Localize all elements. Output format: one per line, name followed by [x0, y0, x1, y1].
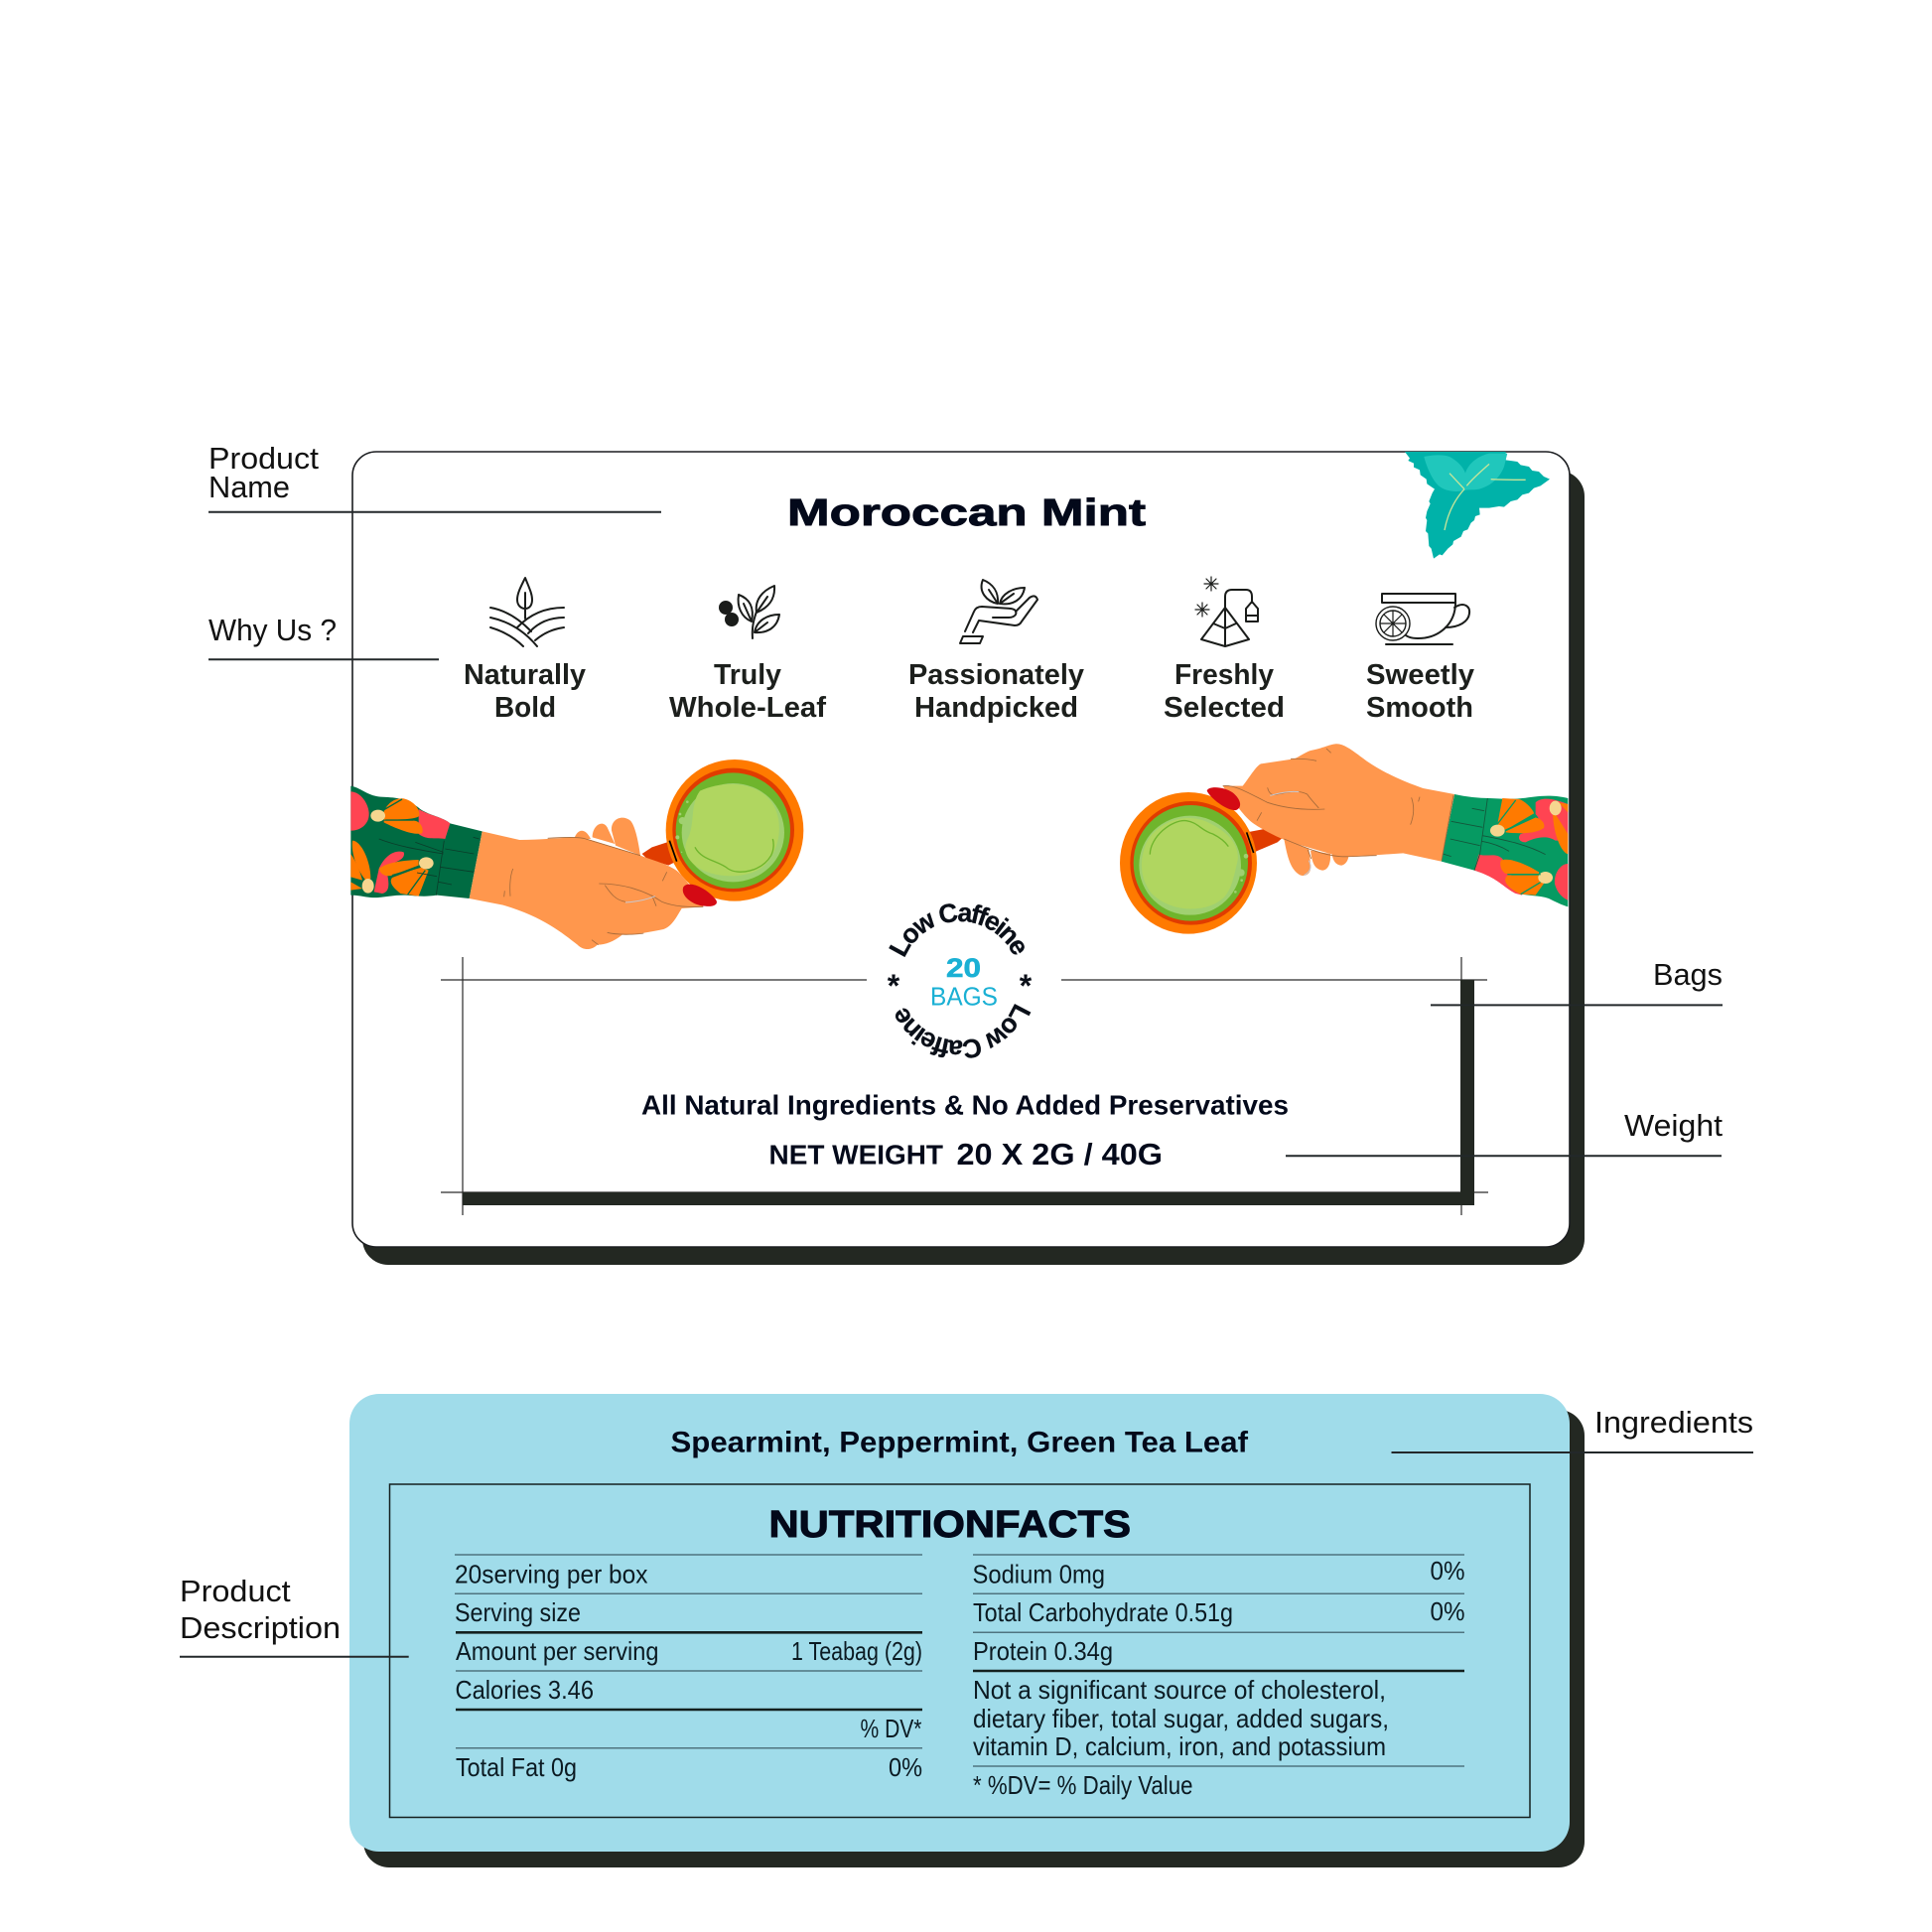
card body [352, 452, 1570, 1247]
back fingers [1284, 839, 1348, 876]
badge: low caffeine 20 bags [888, 903, 1033, 1058]
nutrition table: left column: Serving size [455, 1597, 581, 1627]
cup [666, 759, 803, 901]
badge: low caffeine 20 bags: * [888, 968, 900, 1004]
nutrition table: right column: Not a significant source of cholesterol, [973, 1675, 1386, 1705]
icon: leaf sprig with berries [720, 586, 779, 638]
caption: Naturally Bold [464, 659, 586, 724]
callout: Product Name: Name [208, 470, 290, 504]
caption: Naturally Bold: Bold [494, 692, 556, 724]
cup handle [642, 841, 677, 866]
callout: Product Description: Product [180, 1574, 291, 1608]
nutrition table: left column: Calories 3.46 [455, 1675, 594, 1705]
icon: field with sprout [490, 578, 564, 646]
caption: Naturally Bold: Naturally [464, 659, 586, 691]
callout: Product Description: Description [180, 1610, 341, 1645]
hand [1223, 744, 1454, 862]
badge: low caffeine 20 bags: Low Caffeine [889, 903, 1025, 957]
nutrition table: left column: % DV* [860, 1714, 921, 1743]
net weight text: NET WEIGHT [768, 1140, 943, 1170]
dieline frame [441, 957, 1488, 1215]
nutrition box outline [389, 1484, 1530, 1817]
sleeve [350, 786, 483, 898]
caption: Passionately Handpicked: Handpicked [914, 692, 1078, 724]
callout: Weight: Weight [1624, 1108, 1723, 1143]
icon: pyramid tea bag [1195, 577, 1258, 646]
infographic canvas [180, 447, 1753, 1867]
nutrition table: right column: Total Carbohydrate 0.51g [973, 1597, 1233, 1627]
red nail [1207, 787, 1240, 810]
nutrition table: right column: Sodium 0mg [973, 1559, 1105, 1588]
callout: Product Description [180, 1574, 409, 1657]
caption: Passionately Handpicked [908, 659, 1084, 724]
callout: Ingredients: Ingredients [1594, 1405, 1753, 1440]
caption: Sweetly Smooth: Sweetly [1366, 659, 1474, 691]
hand [470, 831, 703, 949]
caption: Truly Whole-Leaf: Whole-Leaf [669, 692, 826, 724]
card shadow [362, 471, 1585, 1265]
panel body [349, 1394, 1570, 1852]
badge: low caffeine 20 bags: 20 [946, 953, 981, 983]
back fingers [574, 818, 640, 856]
nutrition table: right column [973, 1555, 1465, 1800]
caption: Sweetly Smooth [1366, 659, 1474, 724]
net weight text: 20 X 2G / 40G [957, 1137, 1163, 1172]
panel: ingredients and nutrition [349, 1394, 1585, 1867]
callout: Product Name [208, 441, 661, 512]
caption: Truly Whole-Leaf [669, 659, 826, 724]
nutrition table: right column: 0% [1430, 1556, 1465, 1586]
callout: Product Name: Product [208, 441, 319, 476]
cup handle [1247, 829, 1283, 852]
badge: low caffeine 20 bags: * [1020, 968, 1033, 1004]
nutrition heading: NUTRITIONFACTS [768, 1504, 1131, 1546]
illustration: right hand holding cup [1120, 744, 1568, 934]
nutrition table: left column: 0% [889, 1752, 922, 1782]
nutrition table: right column: Protein 0.34g [973, 1636, 1113, 1666]
illustration: left hand holding cup [350, 759, 803, 949]
icon: mint leaves [1405, 452, 1550, 559]
title: Moroccan Mint [787, 492, 1146, 534]
red nail [683, 885, 717, 906]
caption: Truly Whole-Leaf: Truly [714, 659, 781, 691]
nutrition table: right column: vitamin D, calcium, iron, and potassium [973, 1731, 1386, 1761]
caption: Sweetly Smooth: Smooth [1366, 692, 1473, 724]
caption: Freshly Selected: Selected [1164, 692, 1285, 724]
nutrition table: left column: 20serving per box [455, 1559, 647, 1588]
nutrition table: right column: 0% [1430, 1596, 1465, 1626]
cup [1120, 792, 1257, 934]
nutrition table: right column: * %DV= % Daily Value [973, 1770, 1193, 1800]
claim text: All Natural Ingredients & No Added Preservatives [641, 1090, 1289, 1120]
nutrition table: left column: 1 Teabag (2g) [791, 1636, 922, 1666]
callout: Why Us: Why Us ? [208, 613, 337, 647]
net weight text [768, 1137, 1163, 1172]
panel: front label card [350, 451, 1585, 1265]
badge: low caffeine 20 bags: BAGS [930, 983, 998, 1011]
sleeve [1442, 794, 1568, 906]
nutrition table: left column: Amount per serving [456, 1636, 659, 1666]
caption: Passionately Handpicked: Passionately [908, 659, 1084, 691]
panel shadow [363, 1410, 1585, 1867]
caption: Freshly Selected: Freshly [1174, 659, 1274, 691]
icon: tea cup with lemon [1376, 594, 1469, 644]
nutrition table: right column: dietary fiber, total sugar, added sugars, [973, 1704, 1389, 1733]
caption: Freshly Selected [1164, 659, 1285, 724]
nutrition table: left column: Total Fat 0g [456, 1752, 577, 1782]
nutrition table: left column [455, 1555, 922, 1782]
callout: Bags: Bags [1653, 957, 1723, 992]
badge: low caffeine 20 bags: Low Caffeine [896, 1004, 1031, 1058]
ingredients text: Spearmint, Peppermint, Green Tea Leaf [671, 1426, 1249, 1459]
icon: hand holding leaves [960, 580, 1037, 643]
why us icons and captions [464, 577, 1474, 724]
